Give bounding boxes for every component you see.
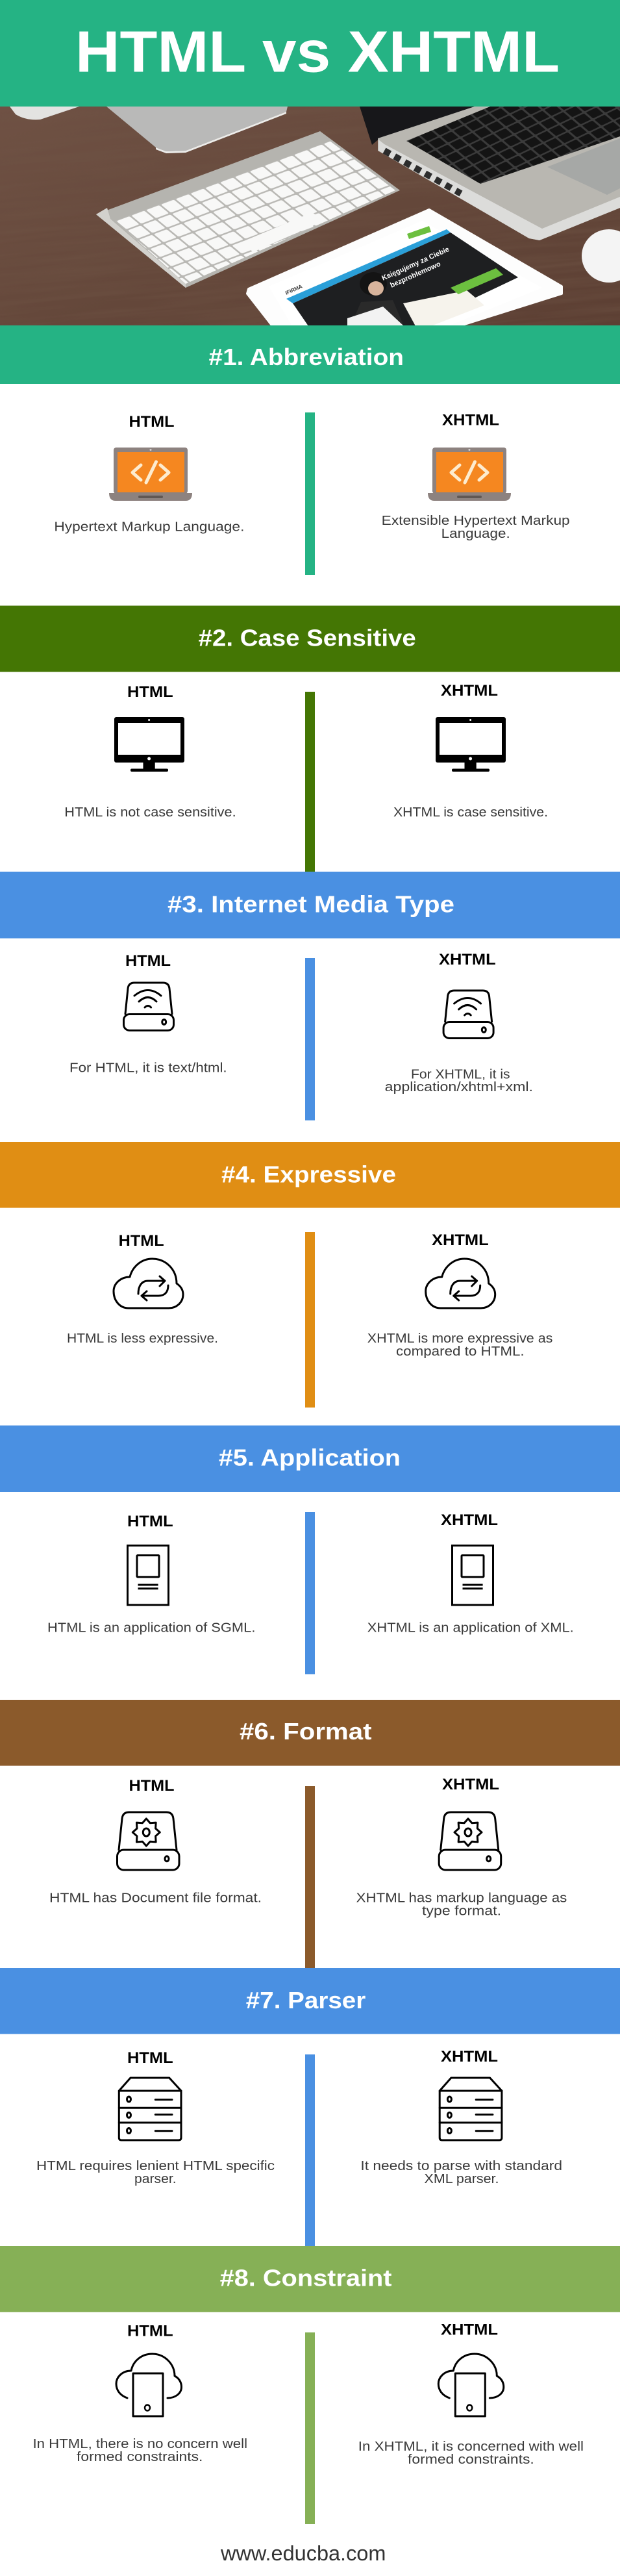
XHTML description: XHTML is case sensitive. bbox=[393, 805, 548, 820]
HTML description: HTML is not case sensitive. bbox=[64, 805, 236, 820]
HTML label: HTML bbox=[119, 1232, 164, 1250]
icon: gear drive (HTML) bbox=[117, 1812, 179, 1870]
XHTML description: XHTML has markup language as bbox=[356, 1891, 567, 1905]
HTML label: HTML bbox=[125, 952, 171, 970]
HTML description: HTML is an application of SGML. bbox=[47, 1621, 255, 1635]
HTML description bbox=[36, 2159, 275, 2186]
icon: server (XHTML) bbox=[440, 2078, 502, 2140]
HTML label: HTML bbox=[129, 413, 174, 431]
XHTML label: XHTML bbox=[442, 1776, 499, 1793]
panel: application bbox=[0, 1426, 620, 1674]
heading: #4: #4. Expressive bbox=[221, 1161, 396, 1187]
title banner: HTML vs XHTML bbox=[75, 20, 560, 85]
XHTML description: application/xhtml+xml. bbox=[385, 1080, 533, 1094]
heading: #3 bbox=[0, 872, 620, 939]
HTML description bbox=[32, 2437, 247, 2464]
XHTML description: In XHTML, it is concerned with well bbox=[358, 2440, 584, 2454]
XHTML label: XHTML bbox=[442, 412, 499, 429]
HTML description: HTML is less expressive. bbox=[67, 1332, 218, 1346]
panel: case sensitive bbox=[0, 605, 620, 872]
XHTML description: compared to HTML. bbox=[396, 1345, 525, 1359]
HTML label: HTML bbox=[127, 683, 173, 701]
icon: gear drive (XHTML) bbox=[439, 1812, 501, 1870]
heading: #1: #1. Abbreviation bbox=[209, 344, 404, 370]
XHTML description bbox=[367, 1332, 552, 1359]
hero photo: desk with keyboard, laptop and tablet: IFIRMA bbox=[284, 283, 303, 296]
icon: cloud sync (XHTML) bbox=[426, 1259, 495, 1308]
XHTML description: formed constraints. bbox=[408, 2453, 534, 2467]
HTML label: HTML bbox=[129, 1777, 174, 1795]
icon: document (HTML) bbox=[127, 1546, 169, 1605]
panel: format bbox=[0, 1700, 620, 1968]
HTML description: In HTML, there is no concern well bbox=[32, 2437, 247, 2451]
XHTML description: XHTML is more expressive as bbox=[367, 1332, 552, 1346]
XHTML description: XML parser. bbox=[425, 2172, 499, 2186]
icon: monitor (HTML) bbox=[114, 717, 184, 772]
panel: constraint bbox=[0, 2246, 620, 2524]
heading: #3: #3. Internet Media Type bbox=[167, 890, 454, 917]
XHTML label: XHTML bbox=[432, 1231, 489, 1249]
hero photo: desk with keyboard, laptop and tablet bbox=[0, 107, 620, 325]
title banner bbox=[0, 0, 620, 107]
heading: #7 bbox=[0, 1968, 620, 2034]
HTML label: HTML bbox=[127, 2323, 173, 2340]
heading: #7: #7. Parser bbox=[246, 1987, 366, 2014]
XHTML label: XHTML bbox=[441, 1511, 498, 1529]
icon: server (HTML) bbox=[119, 2078, 181, 2140]
heading: #1 bbox=[0, 325, 620, 384]
hero photo: desk with keyboard, laptop and tablet: bezproblemowo bbox=[389, 260, 442, 290]
HTML label: HTML bbox=[127, 1513, 173, 1530]
HTML description: parser. bbox=[134, 2172, 177, 2186]
panel: abbreviation bbox=[0, 325, 620, 575]
XHTML label: XHTML bbox=[439, 951, 496, 968]
XHTML description: XHTML is an application of XML. bbox=[367, 1621, 574, 1635]
heading: #8: #8. Constraint bbox=[220, 2264, 392, 2291]
XHTML description: type format. bbox=[422, 1904, 501, 1918]
panel: expressive bbox=[0, 1142, 620, 1408]
panel: internet media type bbox=[0, 872, 620, 1120]
XHTML description bbox=[382, 514, 570, 541]
HTML label: HTML bbox=[127, 2049, 173, 2067]
heading: #8 bbox=[0, 2246, 620, 2312]
XHTML description bbox=[360, 2159, 562, 2186]
HTML description: HTML requires lenient HTML specific bbox=[36, 2159, 275, 2173]
icon: laptop code (XHTML) bbox=[428, 448, 511, 501]
heading: #6 bbox=[0, 1700, 620, 1766]
XHTML label: XHTML bbox=[441, 2048, 498, 2065]
footer: website: www.educba.com bbox=[220, 2542, 386, 2565]
XHTML label: XHTML bbox=[441, 2321, 498, 2339]
icon: laptop code (HTML) bbox=[109, 448, 192, 501]
icon: cloud phone (HTML) bbox=[116, 2354, 182, 2416]
XHTML label: XHTML bbox=[441, 682, 498, 700]
icon: cloud sync (HTML) bbox=[114, 1259, 183, 1308]
HTML description: formed constraints. bbox=[77, 2450, 203, 2464]
XHTML description bbox=[358, 2440, 584, 2467]
XHTML description: Language. bbox=[441, 527, 510, 541]
icon: document (XHTML) bbox=[452, 1546, 493, 1605]
hero photo: desk with keyboard, laptop and tablet: Księgujemy za Ciebie bbox=[380, 246, 451, 283]
heading: #6: #6. Format bbox=[240, 1718, 372, 1745]
XHTML description: It needs to parse with standard bbox=[360, 2159, 562, 2173]
HTML description: Hypertext Markup Language. bbox=[54, 520, 244, 534]
heading: #4 bbox=[0, 1142, 620, 1208]
heading: #2 bbox=[0, 605, 620, 672]
panel: parser bbox=[0, 1968, 620, 2246]
heading: #5 bbox=[0, 1426, 620, 1492]
icon: monitor (XHTML) bbox=[436, 717, 506, 772]
heading: #2: #2. Case Sensitive bbox=[199, 624, 416, 651]
HTML description: For HTML, it is text/html. bbox=[69, 1061, 227, 1076]
icon: wifi drive (HTML) bbox=[123, 983, 174, 1030]
XHTML description bbox=[356, 1891, 567, 1918]
XHTML description: For XHTML, it is bbox=[411, 1068, 510, 1082]
icon: cloud phone (XHTML) bbox=[438, 2354, 504, 2416]
icon: wifi drive (XHTML) bbox=[443, 991, 493, 1038]
XHTML description bbox=[385, 1068, 533, 1094]
HTML description: HTML has Document file format. bbox=[49, 1891, 262, 1905]
XHTML description: Extensible Hypertext Markup bbox=[382, 514, 570, 528]
heading: #5: #5. Application bbox=[219, 1444, 401, 1471]
